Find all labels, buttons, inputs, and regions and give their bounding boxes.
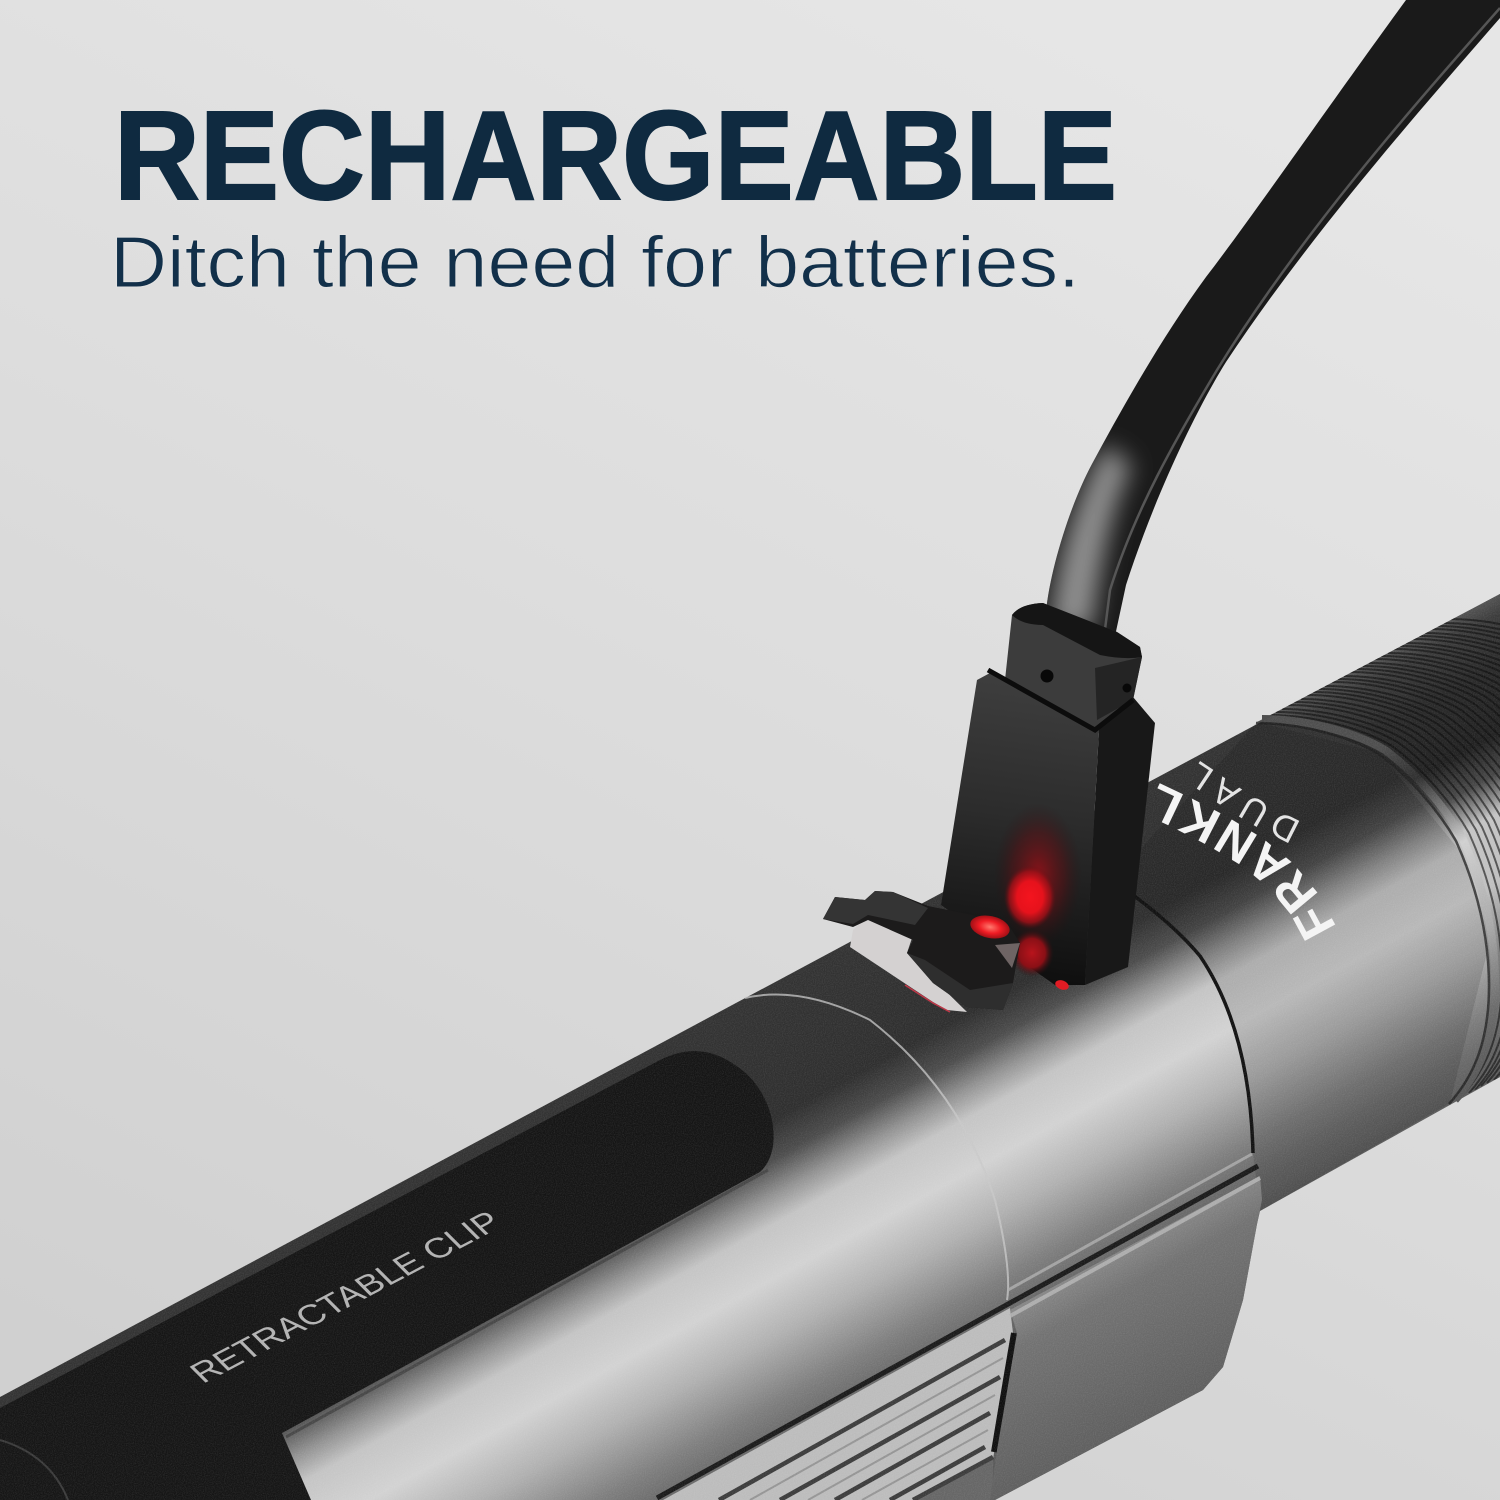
neck side shade [1095, 657, 1142, 720]
barrel label: FRANKLIN DUAL: FRANKLIN [1148, 778, 1335, 941]
clip lower bevel [286, 1170, 768, 1437]
red reflection low [1010, 929, 1054, 977]
subtitle: Ditch the need for batteries. [110, 223, 1080, 303]
surface grain [0, 590, 1500, 1500]
barrel label: FRANKLIN DUAL: DUAL [1196, 761, 1300, 843]
neck holes [1040, 670, 1054, 682]
flap rubber [823, 891, 1020, 1010]
seam two [1112, 880, 1253, 1153]
flap lower area [907, 953, 1013, 1010]
flap chip [995, 943, 1020, 968]
plug side face [1085, 697, 1155, 985]
seam one [745, 994, 1008, 1300]
USB plug [941, 603, 1155, 992]
plug rim [988, 670, 1133, 730]
title: RECHARGEABLE [114, 85, 1117, 226]
flashlight body [0, 580, 1500, 1500]
clip label: RETRACTABLE CLIP [182, 1204, 508, 1389]
ribbed head [1257, 594, 1500, 1093]
flap pink edge [905, 985, 950, 1012]
red dot [1054, 978, 1070, 992]
section shading near head [1112, 722, 1500, 1211]
charging cable [1046, 0, 1500, 650]
plug neck [1005, 603, 1142, 735]
flap pale layer [850, 915, 967, 1012]
groove [657, 1154, 1260, 1498]
broken rubber flap [823, 891, 1020, 1012]
red glow on plug [1004, 865, 1056, 929]
red halo on plug [994, 803, 1082, 947]
end cap seam [0, 1440, 68, 1500]
barrel [0, 594, 1500, 1500]
plug front face [941, 673, 1099, 985]
clip pill [0, 1051, 774, 1500]
red LED [968, 912, 1012, 942]
neck rim [1012, 603, 1142, 658]
head rim [1256, 719, 1495, 1104]
cable highlight [1050, 445, 1132, 630]
barrel label: FRANKLIN DUAL [1148, 761, 1335, 941]
side wing [990, 1176, 1262, 1500]
flap lighter area [823, 891, 928, 925]
ribbed grip [645, 1308, 1014, 1500]
